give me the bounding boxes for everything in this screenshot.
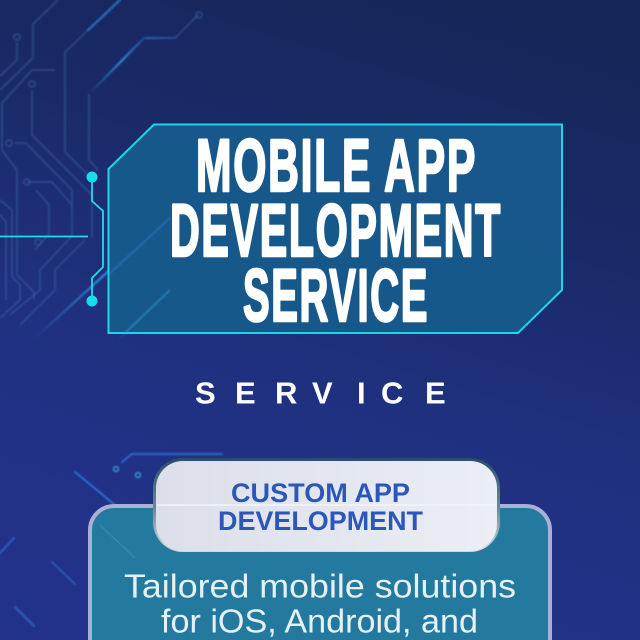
card description xyxy=(124,568,516,640)
lower left glow lines xyxy=(0,454,222,626)
title panel xyxy=(108,124,562,337)
pill heading: CUSTOM APP xyxy=(231,478,410,508)
service name pill xyxy=(153,458,500,552)
glowing diagonal traces xyxy=(33,0,176,340)
card description: Tailored mobile solutions xyxy=(124,568,516,604)
pill heading xyxy=(218,478,423,536)
service card xyxy=(90,506,550,640)
section heading: service: SERVICE xyxy=(195,376,446,410)
title: SERVICE xyxy=(243,254,429,337)
card description: for iOS, Android, and xyxy=(161,602,478,640)
circuit board pattern xyxy=(0,0,202,325)
icon: bottom cyan node xyxy=(86,296,98,306)
icon: top cyan node xyxy=(86,172,98,182)
pill heading: DEVELOPMENT xyxy=(218,506,423,536)
title xyxy=(170,124,502,337)
connector: node wires and horizontal line xyxy=(0,172,103,306)
